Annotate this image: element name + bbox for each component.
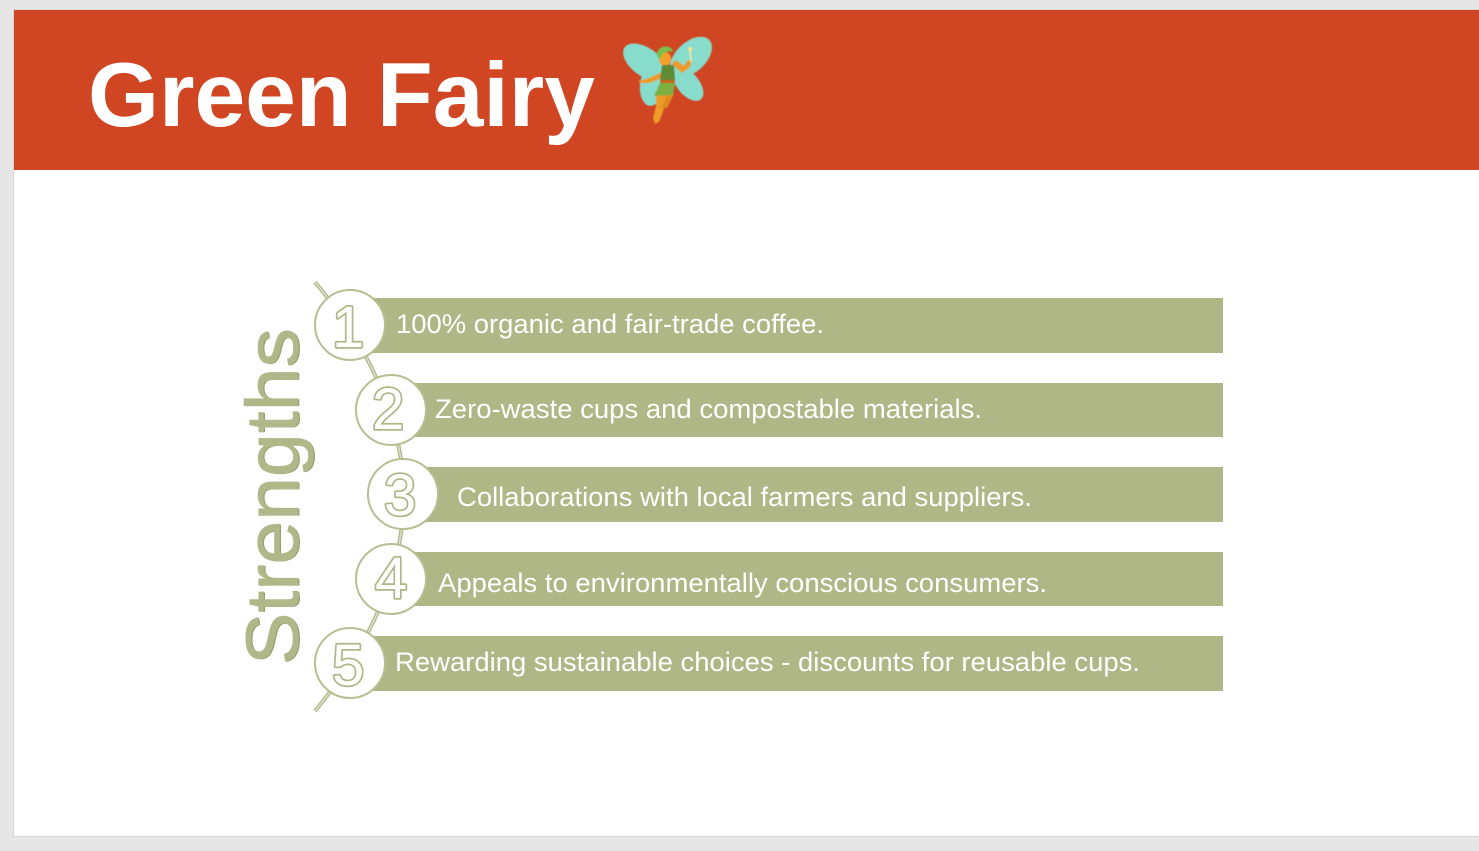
header banner [14, 10, 1479, 170]
title: Green Fairy [88, 45, 595, 146]
item 5: 5 [332, 633, 364, 698]
item 4 [356, 544, 1223, 614]
curved connector [315, 282, 404, 711]
item 3: Collaborations with local farmers and suppliers. [457, 482, 1032, 512]
item 1: 100% organic and fair-trade coffee. [396, 309, 824, 339]
heading: Strengths: Strengths [232, 328, 316, 666]
heading: Strengths: Strengths [231, 328, 314, 665]
item 2 [356, 375, 1223, 445]
item 2: 2 [372, 377, 404, 442]
item 2: Zero-waste cups and compostable materials. [435, 394, 982, 424]
item 3 [368, 459, 1223, 529]
item 5: Rewarding sustainable choices - discounts for reusable cups. [395, 647, 1140, 677]
item 3: 3 [384, 463, 416, 528]
item 4: Appeals to environmentally conscious consumers. [438, 568, 1047, 598]
item 5 [315, 628, 1223, 698]
item 4: 4 [375, 546, 407, 611]
list diagram: strengths [315, 282, 1223, 711]
item 1 [315, 290, 1223, 360]
item 1: 1 [332, 295, 364, 360]
icon: fairy [617, 29, 720, 124]
